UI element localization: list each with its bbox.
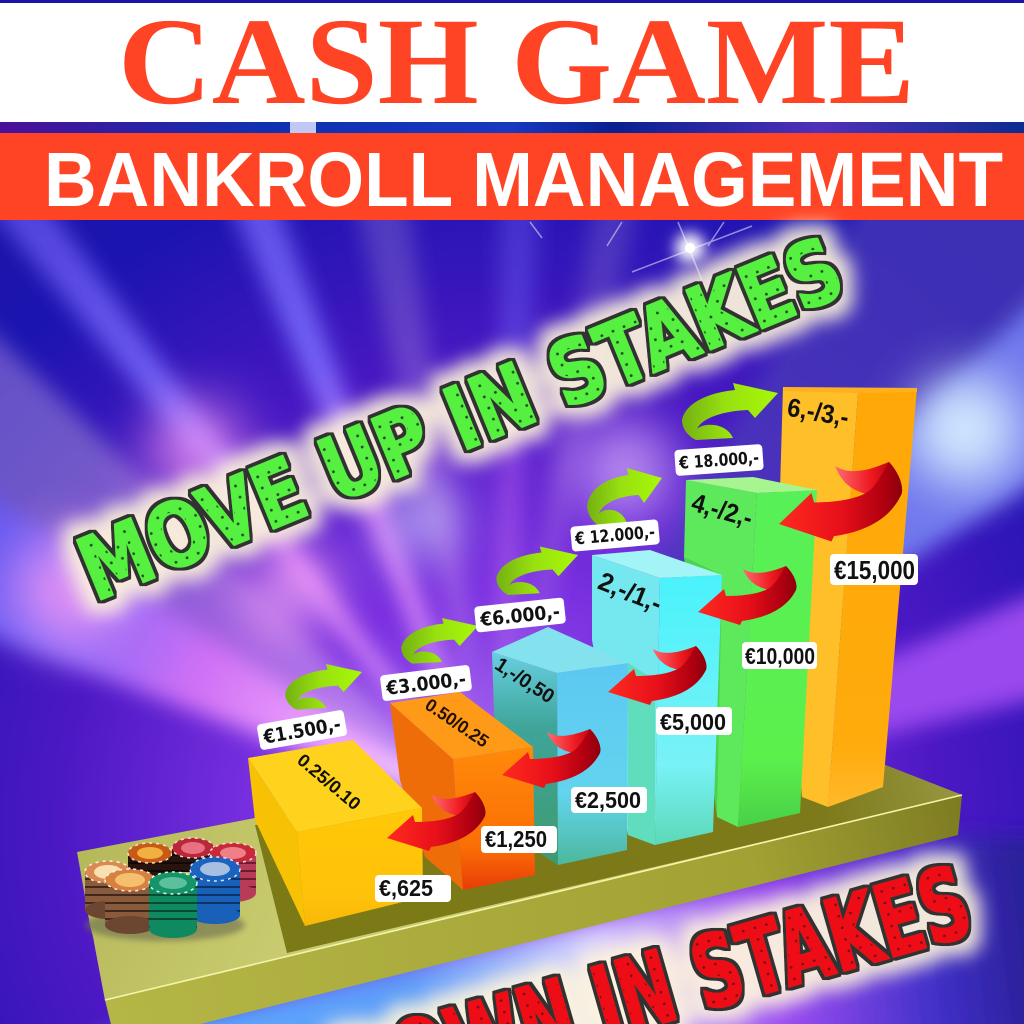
slogan: move up in stakes: MOVE UP IN STAKES [64, 217, 857, 621]
bar: 2,-/1,- [592, 550, 722, 845]
platform [77, 765, 962, 1024]
arrow: move down to 2,-/1,- [698, 566, 797, 625]
bar: 0.25/0.10 [248, 740, 423, 926]
label: move-down threshold 1,250: €1,250 [485, 826, 547, 852]
bar: 0.50/0.25 [390, 692, 535, 890]
bar: 0.50/0.25: 0.50/0.25 [422, 695, 492, 751]
arrow: move down to 1,-/0,50 [608, 646, 707, 705]
label: move-down threshold 5,000: €5,000 [660, 709, 726, 735]
bar: 6,-/3,-: 6,-/3,- [785, 392, 851, 432]
label: move-down threshold 15,000: €15,000 [834, 555, 915, 585]
bar: 6,-/3,- [780, 387, 917, 807]
arrow: move up to 2,-/1,- [496, 546, 578, 595]
label: move-up threshold 18.000: € 18.000,- [678, 448, 760, 474]
label: move-up threshold 3.000: €3.000,- [384, 668, 467, 700]
sparkle flare [530, 222, 752, 280]
bar: 1,-/0,50: 1,-/0,50 [491, 654, 558, 708]
bar: 1,-/0,50 [491, 627, 628, 865]
arrow: move down to 0.50/0.25 [502, 729, 601, 788]
label: move-down threshold 2,500: €2,500 [575, 787, 641, 813]
arrow: move down to 0.25/0.10 [387, 792, 486, 851]
bar: 0.25/0.10: 0.25/0.10 [293, 750, 365, 814]
bar: 4,-/2,- [684, 477, 817, 827]
label: move-down threshold 625: €,625 [379, 875, 433, 901]
poker chips [85, 838, 256, 941]
arrow: move up to 4,-/2,- [587, 468, 662, 525]
arrow: move up to 0.50/0.25 [285, 664, 362, 710]
label: move-up threshold 1.500: €1.500,- [261, 713, 342, 749]
label: move-up threshold 6.000: €6.000,- [478, 601, 561, 631]
bar: 2,-/1,-: 2,-/1,- [594, 566, 667, 618]
arrow: move up to 1,-/0,50 [401, 618, 478, 664]
arrow: move down to 4,-/2,- [779, 462, 902, 542]
label: move-up threshold 12.000: € 12.000,- [574, 523, 656, 550]
label: move-down threshold 10,000: €10,000 [745, 643, 815, 669]
bar: 4,-/2,-: 4,-/2,- [688, 487, 756, 533]
arrow: move up to 6,-/3,- [682, 383, 778, 440]
